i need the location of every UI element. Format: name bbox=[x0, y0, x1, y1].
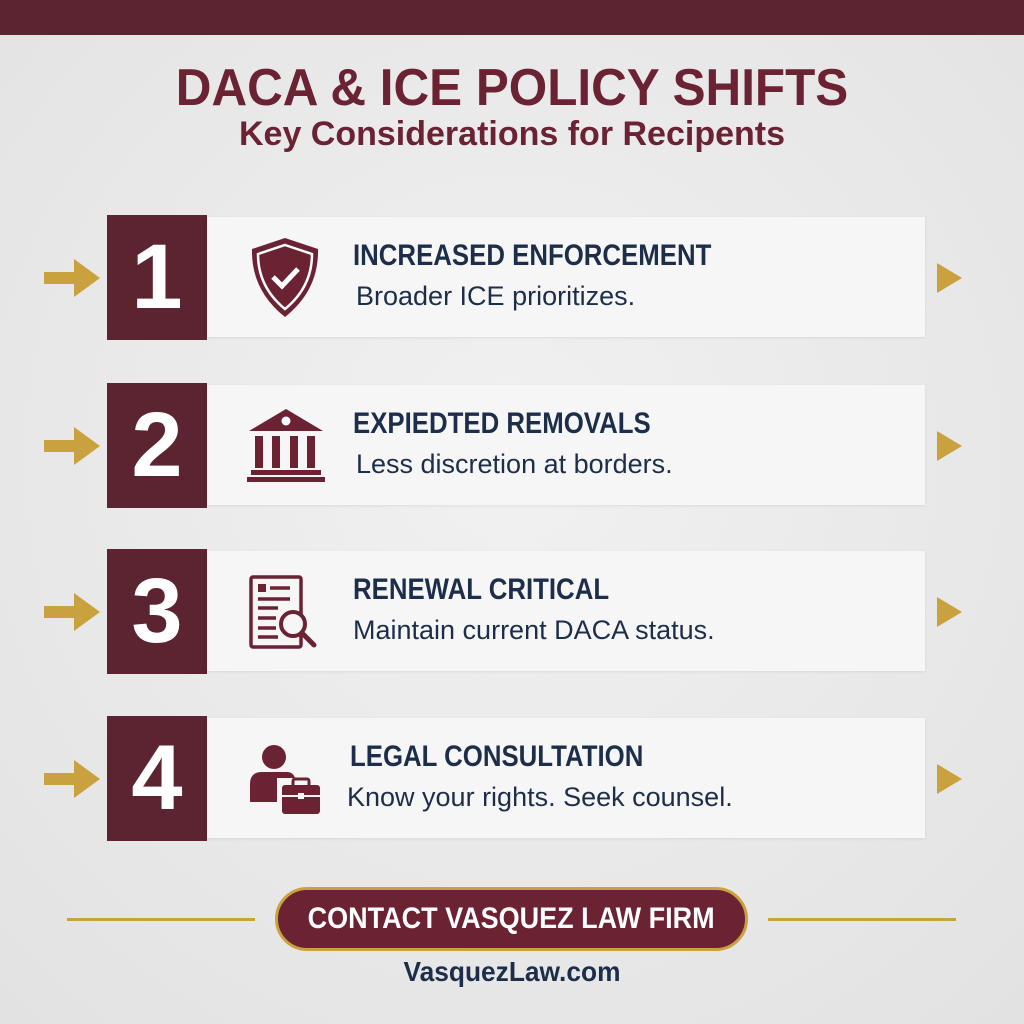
row 4 bbox=[44, 716, 962, 841]
gold lines bbox=[67, 918, 255, 921]
number 3: 3 bbox=[131, 560, 183, 662]
title: DACA & ICE POLICY SHIFTS bbox=[176, 59, 848, 117]
contact button bbox=[275, 887, 748, 951]
arrow 4 bbox=[44, 760, 100, 798]
card 4 bbox=[207, 718, 925, 838]
text 2: Less discretion at borders. bbox=[356, 449, 673, 479]
number 1: 1 bbox=[131, 226, 183, 328]
row 1 bbox=[44, 215, 962, 340]
number 4 bbox=[107, 716, 207, 841]
arrow 3 bbox=[44, 593, 100, 631]
number 4: 4 bbox=[131, 727, 183, 829]
triangle 1 bbox=[937, 263, 962, 293]
number 2 bbox=[107, 383, 207, 508]
text 3: Maintain current DACA status. bbox=[353, 615, 715, 645]
card 2 bbox=[207, 385, 925, 505]
number 3 bbox=[107, 549, 207, 674]
card 1 bbox=[207, 217, 925, 337]
text 1: Broader ICE prioritizes. bbox=[356, 281, 635, 311]
icon: person with briefcase bbox=[250, 745, 320, 814]
heading 4: LEGAL CONSULTATION bbox=[350, 740, 643, 773]
triangle 2 bbox=[937, 431, 962, 461]
text 4: Know your rights. Seek counsel. bbox=[347, 782, 733, 812]
number 1 bbox=[107, 215, 207, 340]
heading 1: INCREASED ENFORCEMENT bbox=[353, 239, 711, 272]
heading 3: RENEWAL CRITICAL bbox=[353, 573, 609, 606]
icon: courthouse bbox=[247, 409, 325, 482]
triangle 4 bbox=[937, 764, 962, 794]
icon: shield bbox=[252, 238, 318, 317]
row 3 bbox=[44, 549, 962, 674]
arrow 1 bbox=[44, 259, 100, 297]
card 3 bbox=[207, 551, 925, 671]
triangle 3 bbox=[937, 597, 962, 627]
top bar bbox=[0, 0, 1024, 35]
number 2: 2 bbox=[131, 394, 183, 496]
icon: document search bbox=[249, 575, 316, 649]
heading 2: EXPIEDTED REMOVALS bbox=[353, 407, 651, 440]
subtitle: Key Considerations for Recipents bbox=[239, 115, 785, 153]
row 2 bbox=[44, 383, 962, 508]
contact button: CONTACT VASQUEZ LAW FIRM bbox=[308, 902, 715, 935]
arrow 2 bbox=[44, 427, 100, 465]
website: VasquezLaw.com bbox=[404, 956, 620, 987]
